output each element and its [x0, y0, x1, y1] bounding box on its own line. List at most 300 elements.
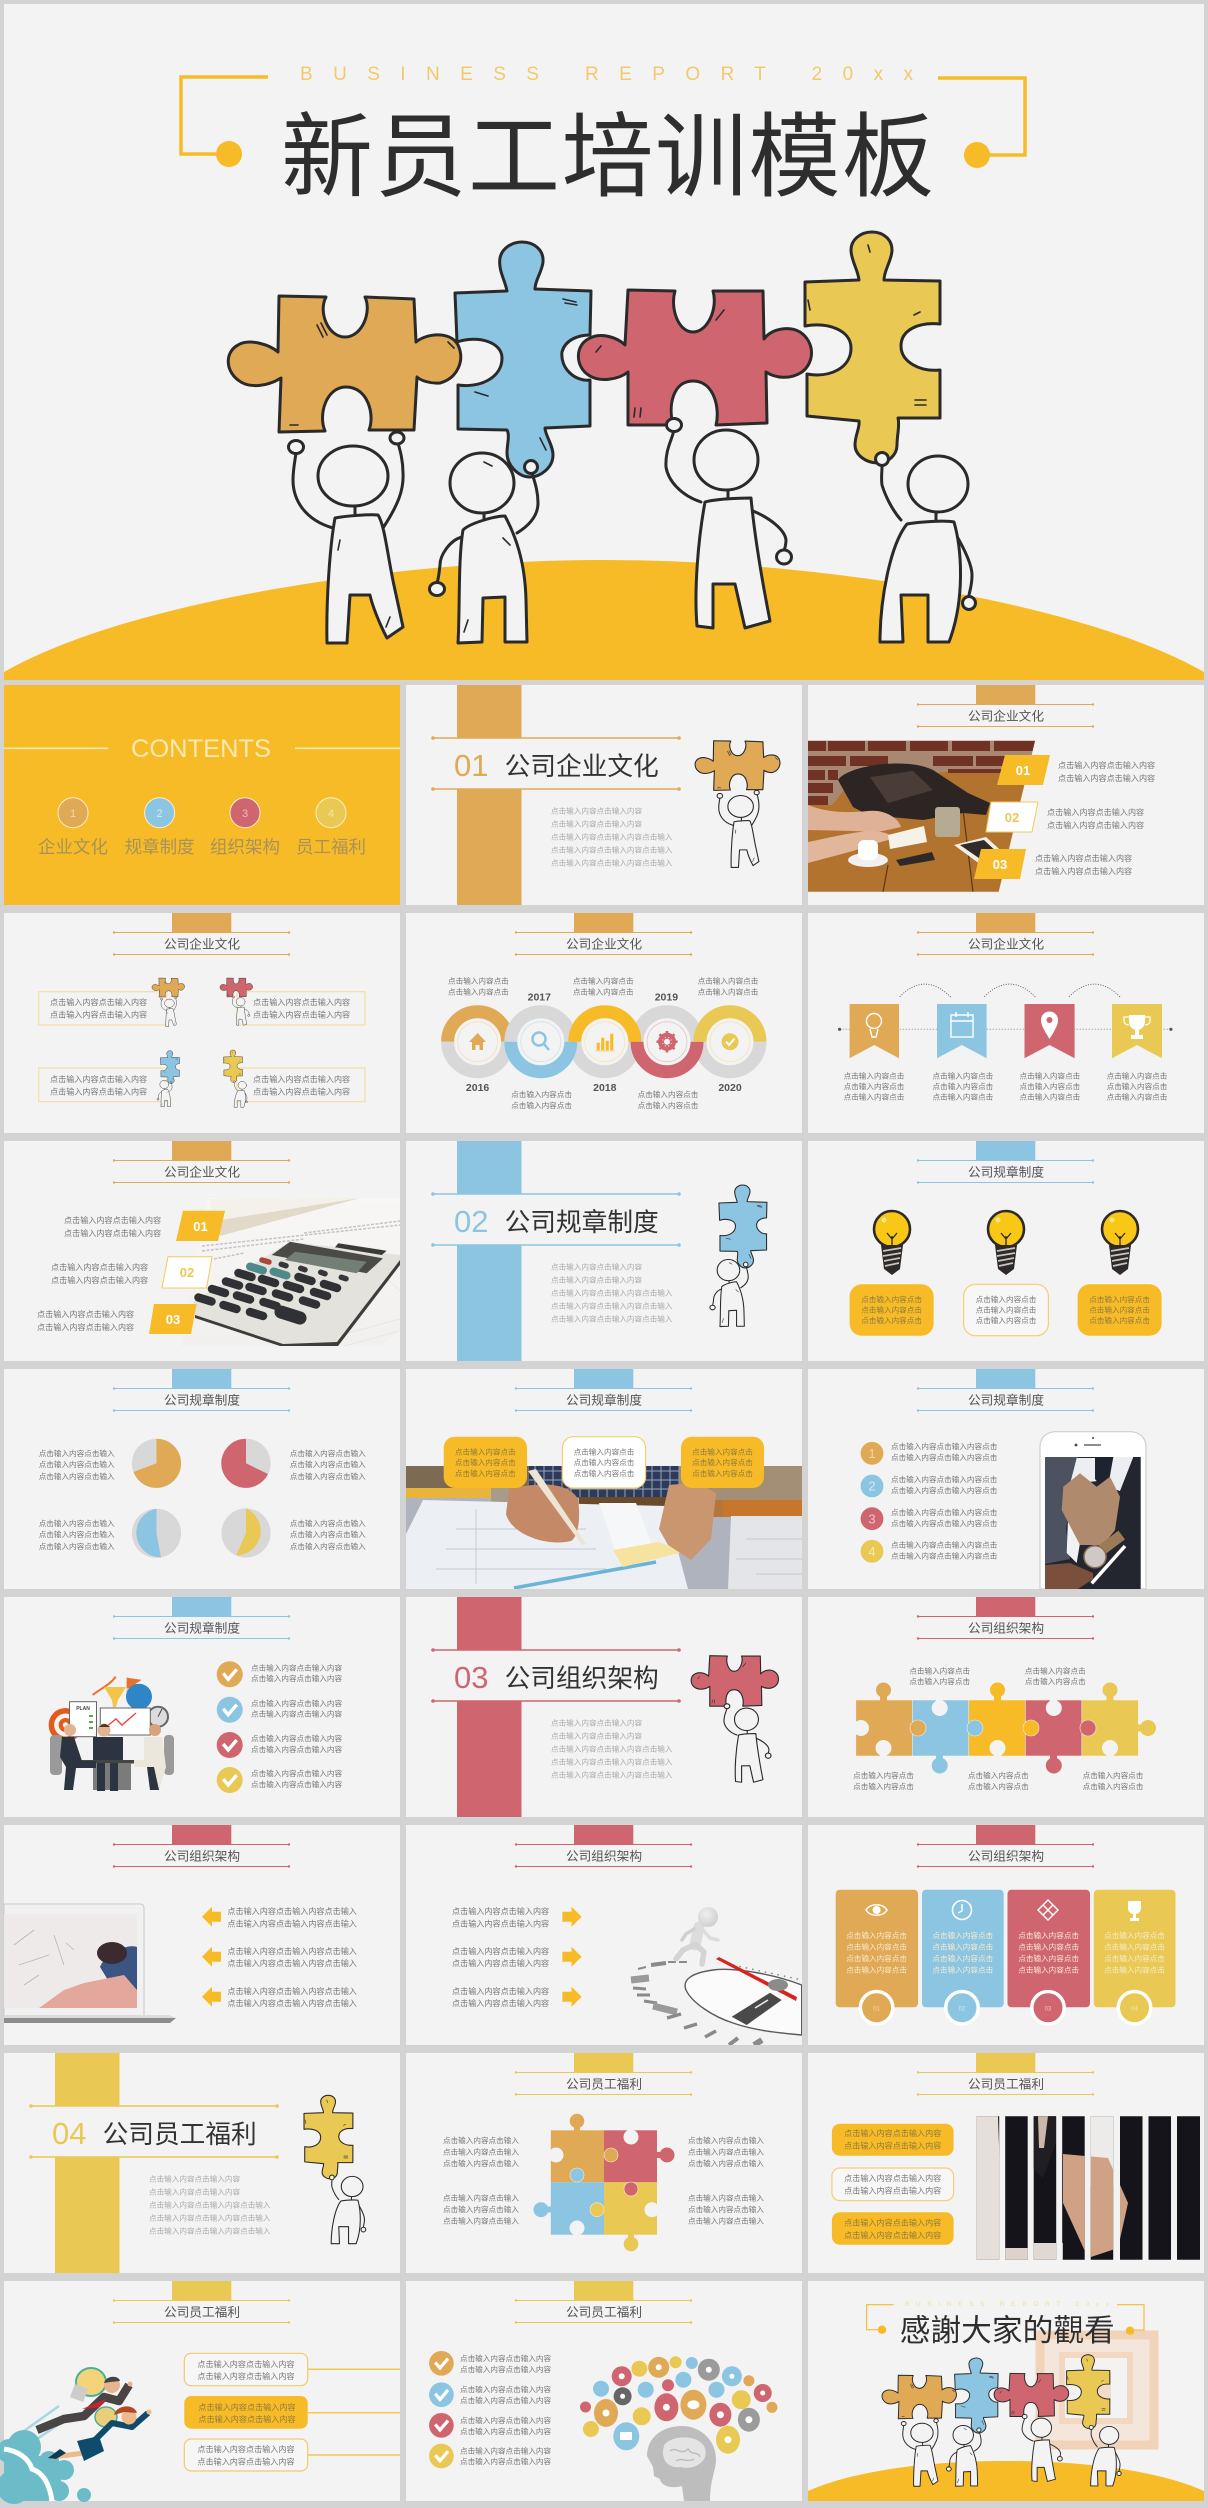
photo strips: suit and hands — [976, 2116, 1202, 2260]
chapter item 3: 组织架构 — [210, 837, 280, 857]
phone — [1040, 1432, 1146, 1589]
right captions: 点击输入内容点击输入 — [688, 2204, 764, 2214]
bottom labels — [853, 1770, 1144, 1791]
header title: 公司员工福利 — [968, 2078, 1044, 2092]
left bracket with dot — [181, 77, 268, 167]
header title: 公司员工福利 — [566, 2306, 642, 2320]
top labels: 点击输入内容点击 — [698, 976, 759, 986]
captions: 点击输入内容点击 — [933, 1092, 994, 1102]
box 1: 点击输入内容点击输入内容 — [197, 2371, 295, 2381]
header title: 公司员工福利 — [164, 2306, 240, 2320]
header title: 公司企业文化 — [164, 1164, 240, 1180]
check item 2 — [429, 2382, 552, 2407]
head silhouette with brain — [647, 2426, 716, 2501]
top labels: 点击输入内容点击 — [448, 986, 509, 996]
list item 3: 点击输入内容点击输入内容点击 — [891, 1518, 998, 1528]
captions: 点击输入内容点击 — [933, 1070, 994, 1080]
section number and title: 公司员工福利 — [103, 2120, 257, 2149]
section body text: 点击输入内容点击输入内容 — [551, 1730, 643, 1740]
main title: 新员工培训模板 — [281, 107, 934, 209]
check item 1: 点击输入内容点击输入内容 — [251, 1662, 343, 1672]
list item 4: 点击输入内容点击输入内容点击 — [891, 1540, 998, 1550]
section body text: 点击输入内容点击输入内容点击输入 — [551, 844, 673, 854]
right captions: 点击输入内容点击输入 — [290, 1541, 366, 1551]
icon: check badge — [722, 1033, 738, 1050]
right captions: 点击输入内容点击输入 — [290, 1448, 366, 1458]
top labels — [909, 1666, 1086, 1686]
tag 02 — [162, 1257, 212, 1288]
right captions: 点击输入内容点击输入 — [688, 2216, 764, 2226]
section number and title — [454, 748, 659, 783]
panel: photo with numbered notes — [808, 685, 1204, 905]
box 1: 点击输入内容点击输入内容 — [844, 2128, 941, 2138]
card 2: 点击输入内容点击 — [932, 1930, 994, 1940]
captions: 点击输入内容点击 — [844, 1081, 905, 1091]
box bottom-right: 点击输入内容点击输入内容 — [253, 1074, 350, 1084]
header title: 公司规章制度 — [968, 1164, 1044, 1180]
year labels — [466, 992, 742, 1094]
card 3: 03 — [1045, 2006, 1052, 2012]
small figure orange — [152, 978, 184, 1027]
text rows: 点击输入内容点击输入内容点击输入 — [227, 1946, 357, 1956]
note text 01: 点击输入内容点击输入内容 — [64, 1228, 161, 1238]
section number and title: 公司组织架构 — [505, 1664, 659, 1693]
panel: closing slide — [808, 2281, 1204, 2501]
box 1: 点击输入内容点击 — [455, 1457, 516, 1467]
text rows: 点击输入内容点击输入内容点击输入 — [227, 1906, 357, 1916]
figure with orange puzzle — [695, 741, 780, 867]
box 1 — [184, 2353, 308, 2386]
card 2: 点击输入内容点击 — [932, 1953, 994, 1963]
check item 2: 点击输入内容点击输入内容 — [251, 1698, 343, 1708]
bottom labels: 点击输入内容点击 — [1083, 1770, 1144, 1780]
panel: four puzzle figure boxes — [4, 913, 400, 1133]
check item 1 — [217, 1661, 343, 1687]
check item 3 — [217, 1732, 343, 1758]
box 2: 点击输入内容点击 — [976, 1315, 1037, 1325]
pie orange — [132, 1439, 181, 1488]
box 2 — [964, 1284, 1048, 1336]
panel: four pies — [4, 1369, 400, 1589]
right captions: 点击输入内容点击输入 — [290, 1459, 366, 1469]
captions: 点击输入内容点击 — [1107, 1070, 1168, 1080]
panel: contents — [4, 685, 400, 905]
card 2: 点击输入内容点击 — [932, 1941, 994, 1951]
captions: 点击输入内容点击 — [1020, 1070, 1081, 1080]
icon: search — [532, 1032, 549, 1050]
header title: 公司组织架构 — [566, 1850, 642, 1864]
top labels — [448, 976, 759, 996]
small subtitle: BUSINESS REPORT 20xx — [905, 2301, 1110, 2308]
box 2: 点击输入内容点击输入内容 — [844, 2186, 941, 2196]
box 2: 点击输入内容点击 — [574, 1446, 635, 1456]
bottom labels: 点击输入内容点击 — [1083, 1781, 1144, 1791]
box 1 — [850, 1284, 934, 1336]
chapter item 3 — [210, 798, 280, 857]
panel: runner on compass — [406, 1825, 802, 2045]
left captions: 点击输入内容点击输入 — [39, 1541, 115, 1551]
box 3: 点击输入内容点击 — [692, 1446, 753, 1456]
box top-right: 点击输入内容点击输入内容 — [253, 997, 350, 1007]
captions: 点击输入内容点击 — [1020, 1081, 1081, 1091]
card 4: 点击输入内容点击 — [1104, 1964, 1165, 1974]
section body text: 点击输入内容点击输入内容 — [149, 2186, 241, 2196]
left captions: 点击输入内容点击输入 — [443, 2204, 519, 2214]
puzzle chain — [853, 1682, 1156, 1774]
section body text: 点击输入内容点击输入内容 — [149, 2174, 241, 2184]
chapter item 1 — [38, 798, 108, 857]
tag 01: 01 — [193, 1219, 208, 1234]
text rows: 点击输入内容点击输入内容 — [452, 1998, 549, 2008]
captions: 点击输入内容点击 — [933, 1081, 994, 1091]
section body text: 点击输入内容点击输入内容 — [551, 818, 643, 828]
box 3 — [681, 1437, 764, 1488]
text rows: 点击输入内容点击输入内容点击输入 — [227, 1998, 357, 2008]
check item 3: 点击输入内容点击输入内容 — [251, 1733, 343, 1743]
chapter item 2 — [125, 798, 195, 857]
illustration: four people holding puzzle pieces — [228, 232, 976, 643]
box bottom-left: 点击输入内容点击输入内容 — [50, 1086, 147, 1096]
note text 02 — [1047, 807, 1144, 830]
check item 4: 点击输入内容点击输入内容 — [460, 2446, 552, 2456]
illustration: puzzle figures — [882, 2355, 1121, 2486]
box 1: 点击输入内容点击 — [861, 1294, 922, 1304]
right captions: 点击输入内容点击输入 — [688, 2158, 764, 2168]
top labels: 点击输入内容点击 — [448, 976, 509, 986]
left captions — [443, 2135, 519, 2226]
check item 3 — [429, 2413, 552, 2438]
section body text: 点击输入内容点击输入内容点击输入 — [149, 2226, 271, 2236]
figure with yellow puzzle — [304, 2095, 366, 2244]
box top-right: 点击输入内容点击输入内容 — [253, 1010, 350, 1020]
ribbon 4 trophy — [1112, 1004, 1162, 1058]
tag 03 — [974, 849, 1026, 879]
social icon bubbles — [580, 2356, 778, 2454]
panel: puzzle row — [808, 1597, 1204, 1817]
panel: four-piece puzzle — [406, 2053, 802, 2273]
box 3: 点击输入内容点击输入内容 — [844, 2230, 941, 2240]
box 2: 点击输入内容点击输入内容 — [198, 2402, 296, 2412]
note text 03: 点击输入内容点击输入内容 — [1035, 866, 1132, 876]
captions: 点击输入内容点击 — [1107, 1092, 1168, 1102]
section body text: 点击输入内容点击输入内容 — [551, 1718, 643, 1728]
illustration: 3D runner on compass — [631, 1907, 802, 2045]
small figure blue — [157, 1051, 180, 1107]
box 3: 点击输入内容点击 — [692, 1457, 753, 1467]
card 1: 01 — [873, 2006, 881, 2012]
card 4: 04 — [1131, 2006, 1138, 2012]
tag 03 — [149, 1304, 197, 1334]
panel: section 02 — [406, 1141, 802, 1361]
year labels: 2018 — [593, 1082, 617, 1094]
ribbon 2 calendar — [937, 1004, 987, 1058]
right captions — [290, 1448, 366, 1551]
box 2 — [184, 2396, 308, 2429]
left captions: 点击输入内容点击输入 — [39, 1471, 115, 1481]
check item 2: 点击输入内容点击输入内容 — [251, 1708, 343, 1718]
bulb 2 — [988, 1211, 1024, 1275]
section body text — [551, 1718, 673, 1780]
section number and title: 04 — [52, 2116, 86, 2151]
photo: calculator and pen — [194, 1198, 400, 1346]
card 1: 点击输入内容点击 — [846, 1964, 907, 1974]
list item 1: 点击输入内容点击输入内容点击 — [891, 1441, 998, 1451]
bottom labels — [511, 1089, 699, 1110]
card 4: 点击输入内容点击 — [1104, 1953, 1165, 1963]
note text 01: 点击输入内容点击输入内容 — [1058, 773, 1155, 783]
year labels: 2020 — [718, 1082, 742, 1094]
card 4: 点击输入内容点击 — [1104, 1941, 1165, 1951]
section body text: 点击输入内容点击输入内容点击输入 — [551, 1744, 673, 1754]
section body text: 点击输入内容点击输入内容点击输入 — [551, 1288, 673, 1298]
card 3: 点击输入内容点击 — [1018, 1964, 1079, 1974]
check item 1: 点击输入内容点击输入内容 — [460, 2364, 552, 2374]
pie yellow — [221, 1508, 271, 1558]
icon: bars — [595, 1034, 615, 1051]
check item 3: 点击输入内容点击输入内容 — [460, 2426, 552, 2436]
bottom labels: 点击输入内容点击 — [638, 1100, 699, 1110]
check item 1 — [429, 2351, 552, 2376]
text rows: 点击输入内容点击输入内容 — [452, 1906, 549, 1916]
section body text: 点击输入内容点击输入内容点击输入 — [551, 1300, 673, 1310]
right bracket with dot — [938, 78, 1025, 168]
top labels: 点击输入内容点击 — [1025, 1676, 1086, 1686]
ribbon 1 lightbulb — [850, 1004, 899, 1058]
box top-right — [237, 992, 365, 1025]
left captions: 点击输入内容点击输入 — [443, 2192, 519, 2202]
list item 2: 点击输入内容点击输入内容点击 — [891, 1485, 998, 1495]
box 3: 点击输入内容点击输入内容 — [197, 2444, 295, 2454]
list item 3 — [861, 1507, 998, 1530]
check item 1: 点击输入内容点击输入内容 — [460, 2353, 552, 2363]
check item 3: 点击输入内容点击输入内容 — [460, 2415, 552, 2425]
check item 1: 点击输入内容点击输入内容 — [251, 1673, 343, 1683]
section body text: 点击输入内容点击输入内容点击输入 — [551, 1314, 673, 1324]
box 3: 点击输入内容点击 — [1089, 1304, 1150, 1314]
left bracket — [867, 2305, 894, 2334]
panel: timeline rings — [406, 913, 802, 1133]
box 2: 点击输入内容点击 — [976, 1304, 1037, 1314]
header title: 公司企业文化 — [566, 936, 642, 952]
tag 01: 01 — [1016, 763, 1030, 778]
left captions: 点击输入内容点击输入 — [39, 1459, 115, 1469]
captions — [844, 1070, 1168, 1102]
note text 03 — [1035, 853, 1132, 876]
text rows — [227, 1906, 357, 2008]
box 2: 点击输入内容点击输入内容 — [844, 2173, 941, 2183]
panel: flying people with boxes — [0, 2281, 400, 2504]
section body text: 点击输入内容点击输入内容点击输入 — [551, 1756, 673, 1766]
yellow hill — [4, 560, 1204, 680]
card 1: 点击输入内容点击 — [846, 1941, 907, 1951]
header title: 公司规章制度 — [164, 1620, 240, 1636]
left captions: 点击输入内容点击输入 — [443, 2158, 519, 2168]
box top-left: 点击输入内容点击输入内容 — [50, 997, 147, 1007]
chapter item 2: 规章制度 — [125, 837, 195, 857]
list item 2: 2 — [868, 1479, 876, 1494]
box 1: 点击输入内容点击 — [861, 1315, 922, 1325]
faded stamp decoration — [1040, 2335, 1154, 2445]
tag 02 — [986, 802, 1038, 832]
right captions: 点击输入内容点击输入 — [688, 2135, 764, 2145]
left captions: 点击输入内容点击输入 — [39, 1518, 115, 1528]
right captions: 点击输入内容点击输入 — [290, 1518, 366, 1528]
section number and title — [454, 1660, 659, 1695]
list item 2: 点击输入内容点击输入内容点击 — [891, 1474, 998, 1484]
text rows: 点击输入内容点击输入内容 — [452, 1986, 549, 1996]
section number and title: 公司规章制度 — [505, 1208, 659, 1237]
panel: section 04 — [4, 2053, 400, 2273]
box 3: 点击输入内容点击输入内容 — [197, 2457, 295, 2467]
note text 02: 点击输入内容点击输入内容 — [1047, 820, 1144, 830]
top labels: 点击输入内容点击 — [909, 1676, 970, 1686]
captions: 点击输入内容点击 — [1020, 1092, 1081, 1102]
arrows — [562, 1907, 582, 2007]
box 2 — [562, 1437, 646, 1488]
check item 4: 点击输入内容点击输入内容 — [251, 1779, 343, 1789]
photo: desk with bag and hands — [808, 740, 1038, 892]
note text 02 — [51, 1262, 148, 1285]
left captions: 点击输入内容点击输入 — [39, 1529, 115, 1539]
bottom labels: 点击输入内容点击 — [511, 1100, 572, 1110]
card 3: 点击输入内容点击 — [1018, 1930, 1079, 1940]
list item 1: 点击输入内容点击输入内容点击 — [891, 1452, 998, 1462]
box 2: 点击输入内容点击 — [976, 1294, 1037, 1304]
card 2: 点击输入内容点击 — [932, 1964, 994, 1974]
box 1: 点击输入内容点击 — [455, 1446, 516, 1456]
bottom labels: 点击输入内容点击 — [968, 1781, 1029, 1791]
captions: 点击输入内容点击 — [1107, 1081, 1168, 1091]
chapter item 4: 员工福利 — [296, 837, 366, 857]
illustration: meeting — [49, 1677, 174, 1791]
card 1: 点击输入内容点击 — [846, 1930, 907, 1940]
header title: 公司组织架构 — [968, 1622, 1044, 1636]
panel: brain icon bubbles — [406, 2281, 802, 2501]
pie blue — [132, 1509, 181, 1558]
bottom labels: 点击输入内容点击 — [853, 1781, 914, 1791]
check item 2: 点击输入内容点击输入内容 — [460, 2384, 552, 2394]
top labels: 点击输入内容点击 — [573, 986, 634, 996]
box 2: 点击输入内容点击输入内容 — [198, 2414, 296, 2424]
box 3: 点击输入内容点击 — [692, 1468, 753, 1478]
header title: 公司企业文化 — [968, 936, 1044, 952]
box bottom-left: 点击输入内容点击输入内容 — [50, 1074, 147, 1084]
section body text: 点击输入内容点击输入内容点击输入 — [551, 858, 673, 868]
list item 2 — [861, 1474, 998, 1497]
left captions: 点击输入内容点击输入 — [443, 2146, 519, 2156]
list item 3: 点击输入内容点击输入内容点击 — [891, 1507, 998, 1517]
subtitle: business report: BUSINESS REPORT 20xx — [300, 64, 914, 85]
illustration: cloud and flying people — [0, 2368, 152, 2504]
panel: section 03 — [406, 1597, 802, 1817]
illustration: meeting: PLAN — [76, 1706, 90, 1712]
pie red — [221, 1439, 271, 1488]
right captions: 点击输入内容点击输入 — [688, 2192, 764, 2202]
panel: three lightbulbs — [808, 1141, 1204, 1361]
box bottom-right — [237, 1068, 365, 1102]
icon: home — [469, 1033, 486, 1050]
puzzle square — [534, 2114, 674, 2251]
note text 03: 点击输入内容点击输入内容 — [37, 1309, 134, 1319]
tag 01 — [997, 755, 1050, 785]
section body text — [551, 806, 673, 868]
ribbon 3 pin — [1024, 1004, 1075, 1058]
panel: ribbons flow — [808, 913, 1204, 1133]
captions: 点击输入内容点击 — [844, 1092, 905, 1102]
tag 01 — [176, 1211, 225, 1241]
box 1: 点击输入内容点击输入内容 — [197, 2359, 295, 2369]
section body text: 点击输入内容点击输入内容点击输入 — [551, 1770, 673, 1780]
note text 03 — [37, 1309, 134, 1332]
note text 03: 点击输入内容点击输入内容 — [1035, 853, 1132, 863]
bulb 3 — [1102, 1211, 1138, 1275]
box 3: 点击输入内容点击 — [1089, 1294, 1150, 1304]
right captions: 点击输入内容点击输入 — [290, 1529, 366, 1539]
arrows — [202, 1907, 221, 2007]
bottom labels: 点击输入内容点击 — [968, 1770, 1029, 1780]
small figure yellow — [224, 1050, 247, 1107]
chapter item 4: 4 — [328, 808, 334, 820]
header title: 公司员工福利 — [566, 2078, 642, 2092]
note text 02: 点击输入内容点击输入内容 — [51, 1275, 148, 1285]
card 3 — [1008, 1890, 1090, 2026]
box 3: 点击输入内容点击 — [1089, 1315, 1150, 1325]
chapter item 2: 2 — [157, 808, 163, 820]
photo: hands writing on paper — [406, 1466, 802, 1589]
small figure red — [220, 978, 253, 1025]
card 2: 02 — [959, 2006, 966, 2012]
check item 4 — [217, 1767, 343, 1793]
box 3 — [184, 2439, 308, 2471]
chapter item 3: 3 — [242, 808, 248, 820]
note text 01 — [64, 1215, 161, 1238]
panel: calculator photo — [4, 1141, 404, 1361]
panel: phone list — [808, 1369, 1204, 1589]
chapter item 1: 企业文化 — [38, 837, 108, 857]
yellow hill — [808, 2461, 1204, 2501]
section body text: 点击输入内容点击输入内容点击输入 — [149, 2200, 271, 2210]
note text 02: 点击输入内容点击输入内容 — [1047, 807, 1144, 817]
section body text: 点击输入内容点击输入内容 — [551, 1274, 643, 1284]
top labels: 点击输入内容点击 — [573, 976, 634, 986]
box 1: 点击输入内容点击输入内容 — [844, 2141, 941, 2151]
bottom labels: 点击输入内容点击 — [638, 1089, 699, 1099]
text rows: 点击输入内容点击输入内容 — [452, 1946, 549, 1956]
panel: striped photo — [808, 2053, 1204, 2273]
panel: business meeting checklist — [4, 1597, 400, 1817]
list item 4: 4 — [868, 1544, 876, 1559]
panel: cover slide — [4, 4, 1204, 680]
box 3: 点击输入内容点击输入内容 — [844, 2217, 941, 2227]
figure with blue puzzle — [710, 1185, 767, 1327]
header title: 公司规章制度 — [164, 1392, 240, 1408]
left captions: 点击输入内容点击输入 — [39, 1448, 115, 1458]
section number and title: 01 — [454, 748, 488, 783]
box bottom-right: 点击输入内容点击输入内容 — [253, 1086, 350, 1096]
right captions: 点击输入内容点击输入 — [290, 1471, 366, 1481]
check item 2 — [217, 1697, 343, 1723]
note text 01 — [1058, 760, 1155, 783]
panel: four cards — [808, 1825, 1204, 2045]
section number and title: 02 — [454, 1204, 488, 1239]
section body text: 点击输入内容点击输入内容 — [551, 806, 643, 816]
note text 02: 点击输入内容点击输入内容 — [51, 1262, 148, 1272]
header title: 公司企业文化 — [164, 936, 240, 952]
captions: 点击输入内容点击 — [844, 1070, 905, 1080]
ring chain — [448, 1012, 760, 1072]
box 1 — [444, 1437, 527, 1488]
bottom labels: 点击输入内容点击 — [511, 1089, 572, 1099]
